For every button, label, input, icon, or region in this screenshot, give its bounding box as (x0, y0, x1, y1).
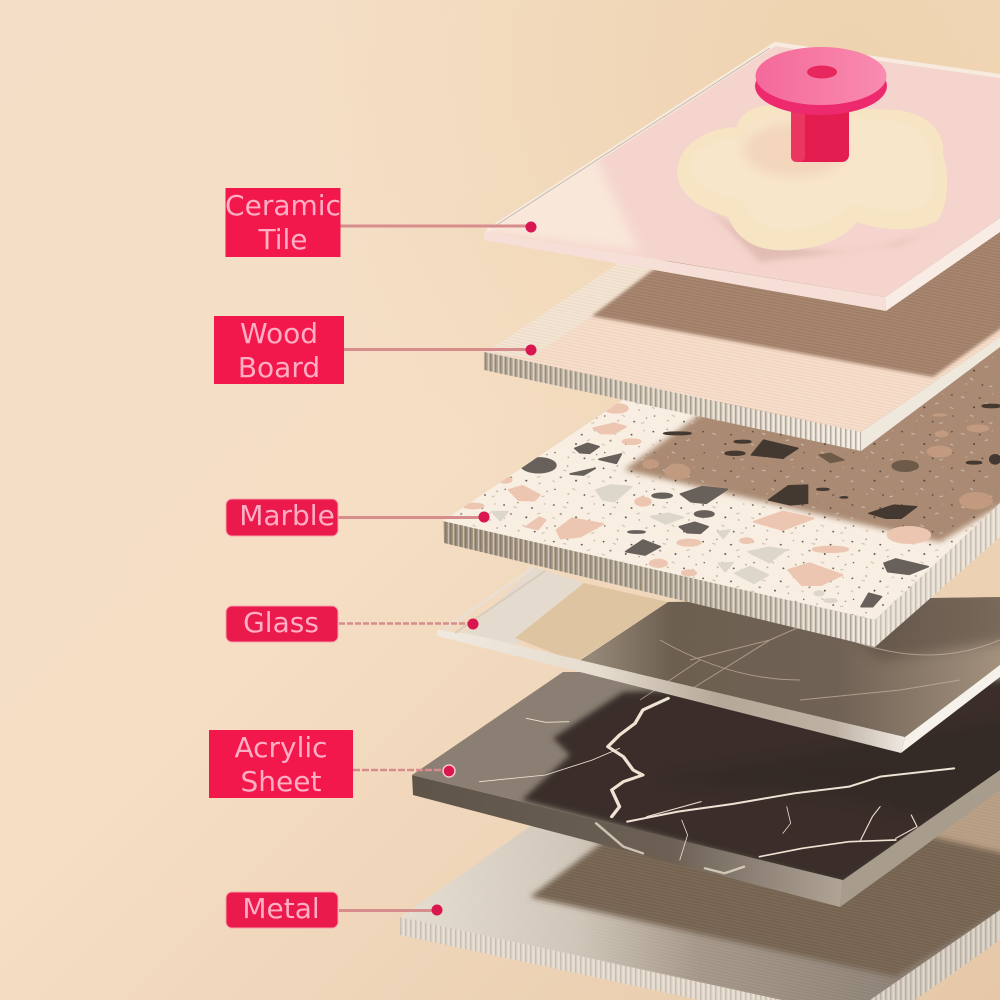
tile highlight (490, 162, 636, 251)
wood top surface (486, 218, 1000, 432)
knob hole (807, 66, 837, 78)
marble top surface (412, 672, 1000, 880)
glass front edge (437, 630, 905, 753)
panel: metal layer (400, 790, 1000, 1000)
terrazzo top surface (443, 341, 1000, 620)
light chips (492, 485, 837, 602)
marble right edge (840, 770, 1000, 907)
marble front edge (412, 775, 843, 907)
dark chips (521, 443, 928, 607)
tile front edge (484, 231, 886, 311)
callout: ceramic tile (225, 188, 536, 257)
callout: glass (226, 606, 478, 642)
callout: metal: Metal (242, 892, 320, 925)
wood front edge (484, 352, 861, 451)
panel: glass layer (437, 567, 1000, 753)
marble seen through glass (576, 597, 1000, 737)
callout: acrylic sheet (209, 730, 455, 798)
callout: wood board: Wood (240, 317, 318, 350)
glass veins (640, 600, 1000, 700)
marble veins (479, 698, 954, 873)
callout: wood board (214, 316, 536, 384)
wood right edge (861, 337, 1000, 451)
glass right edge (901, 665, 1000, 753)
flower shadow (700, 200, 945, 262)
callout: metal (226, 892, 442, 928)
knob stem (791, 105, 849, 162)
callout: ceramic tile: Ceramic (225, 189, 341, 222)
tile top surface (487, 44, 1000, 297)
panel: dark marble layer (400, 660, 1000, 907)
shadowed chips (664, 404, 1000, 518)
terrazzo right edge (875, 503, 1000, 647)
callout: ceramic tile: Tile (257, 223, 308, 256)
metal top surface (400, 790, 1000, 1000)
glass tan shadow (515, 583, 668, 662)
callout: glass: Glass (243, 606, 319, 639)
callout: acrylic sheet: Sheet (241, 765, 321, 798)
panel: ceramic tile layer (470, 44, 1000, 311)
callout: wood board: Board (238, 351, 320, 384)
callout: acrylic sheet: Acrylic (234, 731, 328, 764)
flower base (677, 105, 947, 250)
callout: marble: Marble (239, 499, 335, 532)
pink chips (464, 404, 930, 585)
callout: marble (226, 499, 490, 536)
tile right edge (885, 218, 1000, 311)
glass back-left edge (443, 567, 545, 633)
knob cap (755, 47, 887, 115)
glass clear left pane (462, 567, 584, 645)
metal front edge (400, 917, 782, 1000)
metal right edge (870, 910, 1000, 1000)
terrazzo front edge (443, 521, 875, 647)
panel: wood board layer (480, 195, 1000, 451)
panel: terrazzo layer (443, 341, 1000, 647)
glass top-right darkening (861, 597, 1000, 662)
tile frame edges (487, 44, 1000, 231)
